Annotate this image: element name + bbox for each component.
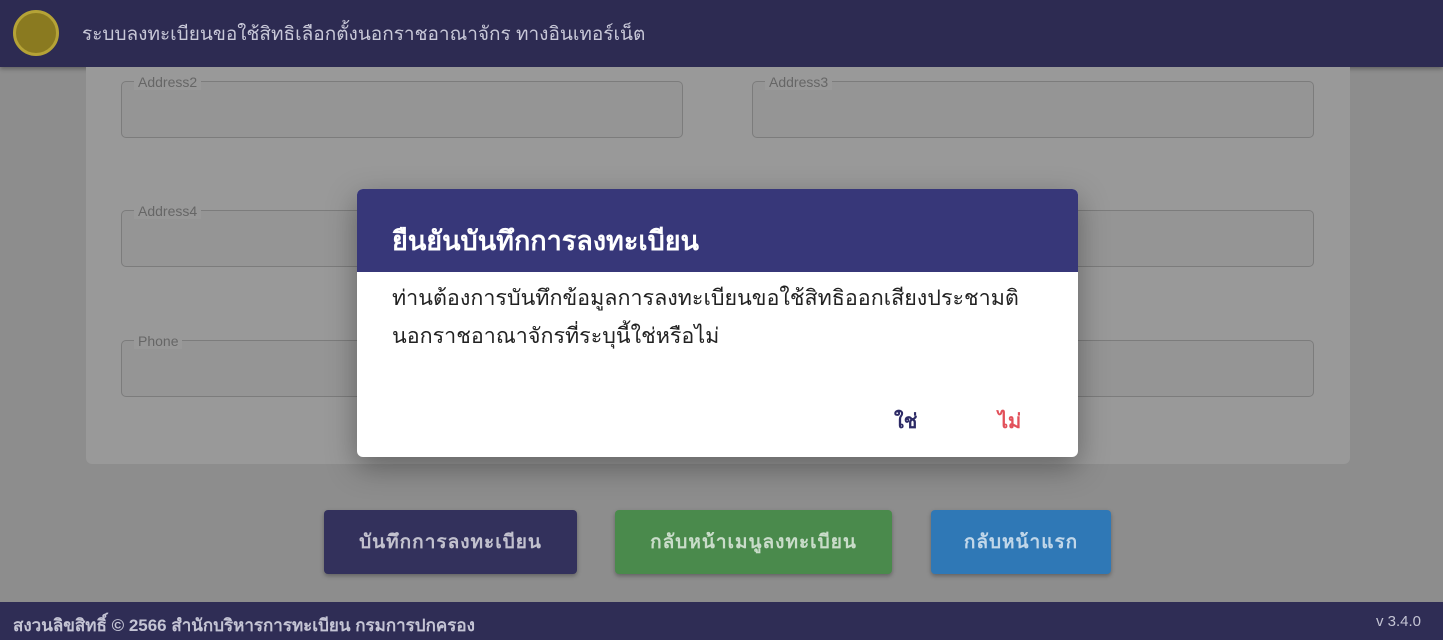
button: yes: ใช่ (894, 411, 917, 433)
field: Address2: Address2 (138, 74, 197, 90)
field: Address4: Address4 (138, 203, 197, 219)
footer copyright: สงวนลิขสิทธิ์ © 2566 สำนักบริหารการทะเบียน กรมการปกครอง (13, 616, 475, 635)
field: Address3: Address3 (769, 74, 828, 90)
field: Address3 (752, 81, 1314, 138)
footer (0, 602, 1443, 640)
modal message: ท่านต้องการบันทึกข้อมูลการลงทะเบียนขอใช้สิทธิออกเสียงประชามติ (392, 286, 1019, 310)
field: Phone: Phone (138, 333, 178, 349)
button: save: บันทึกการลงทะเบียน (359, 532, 542, 553)
modal dialog (357, 189, 1078, 457)
button: home (931, 510, 1111, 574)
field: Address4 (121, 210, 683, 267)
button: no: ไม่ (998, 411, 1021, 433)
button: back to menu: กลับหน้าเมนูลงทะเบียน (650, 532, 857, 553)
button: home: กลับหน้าแรก (964, 532, 1078, 553)
modal header: ยืนยันบันทึกการลงทะเบียน (392, 226, 699, 256)
header title: ระบบลงทะเบียนขอใช้สิทธิเลือกตั้งนอกราชอาณาจักร ทางอินเทอร์เน็ต (82, 24, 645, 45)
footer version: v 3.4.0 (1376, 613, 1421, 630)
field: right 3: ับ) (1043, 363, 1061, 384)
button: save (324, 510, 577, 574)
panel: form card (86, 67, 1350, 464)
header bar (0, 0, 1443, 67)
icon: emblem (13, 10, 59, 56)
modal header (357, 189, 1078, 272)
modal message: นอกราชอาณาจักรที่ระบุนี้ใช่หรือไม่ (392, 324, 719, 348)
field: right 2 (752, 210, 1314, 267)
modal message (392, 286, 1019, 349)
field: Address2 (121, 81, 683, 138)
field: Phone (121, 340, 683, 397)
field: right 3 (752, 340, 1314, 397)
button: back to menu (615, 510, 892, 574)
